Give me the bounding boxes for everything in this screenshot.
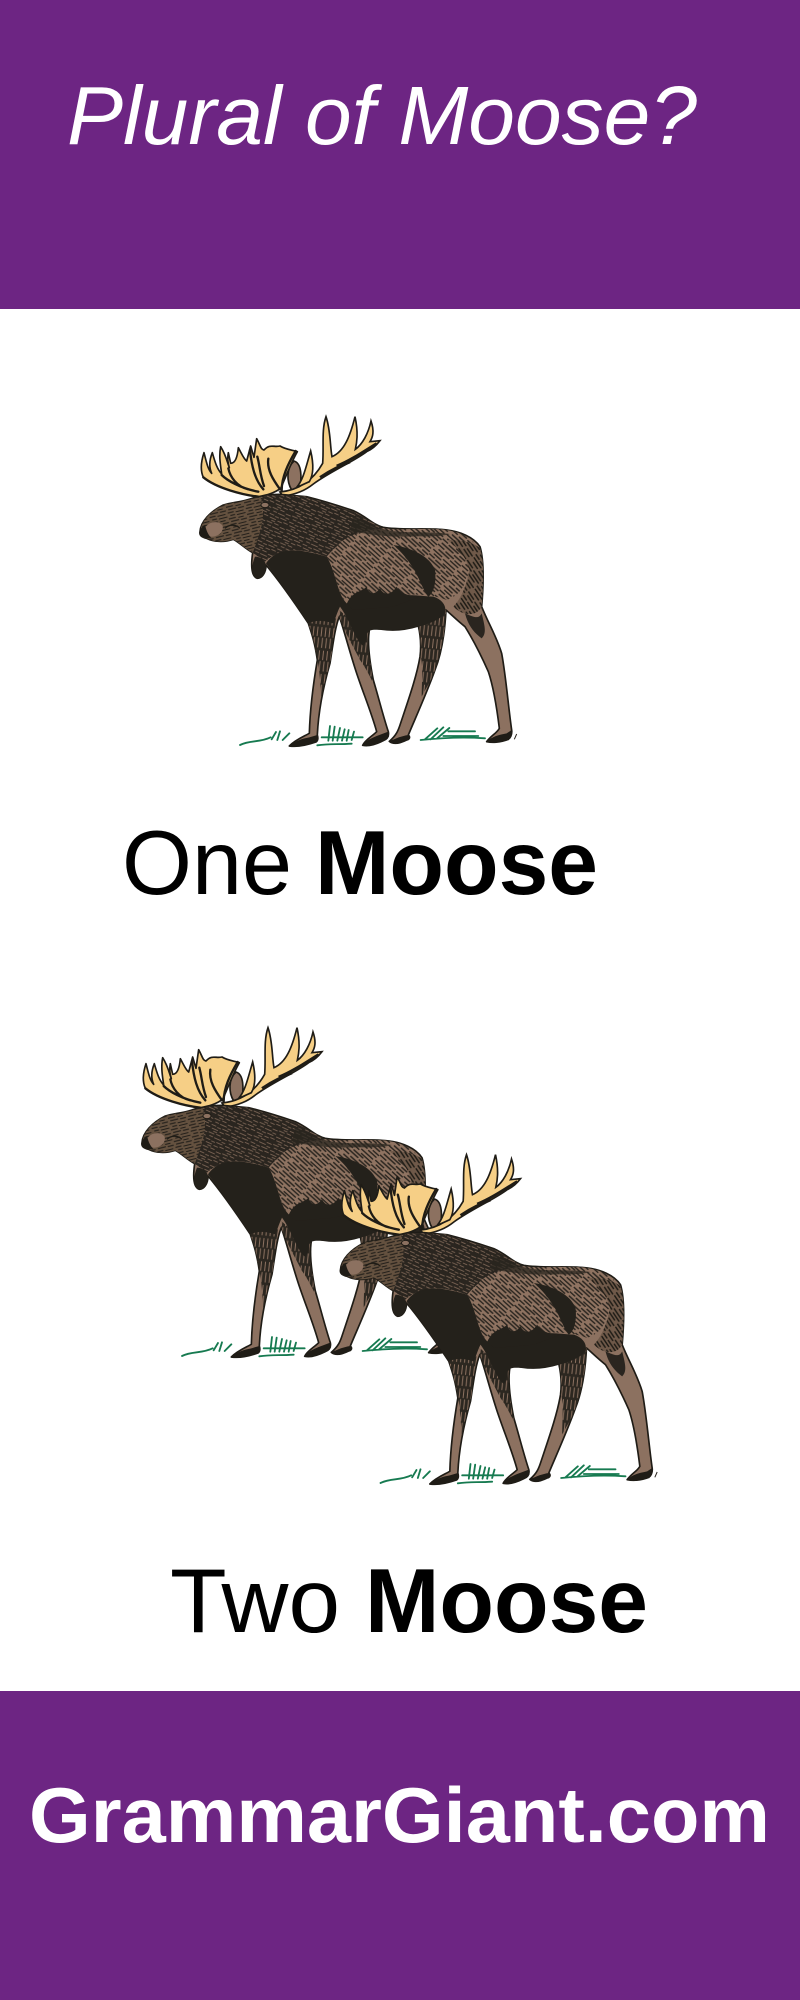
caption: Two Moose xyxy=(170,1551,648,1652)
footer band xyxy=(0,1691,800,2000)
caption: One Moose xyxy=(122,813,598,914)
footer website name: GrammarGiant.com xyxy=(29,1771,770,1859)
caption: One Moose: Moose xyxy=(315,813,598,914)
illustration: front moose of the pair xyxy=(340,1155,657,1484)
illustration: back moose of the pair xyxy=(142,1028,459,1357)
illustration: one moose xyxy=(200,417,517,746)
caption: One Moose: One xyxy=(122,813,292,914)
title: Plural of Moose? xyxy=(67,69,697,162)
caption: Two Moose: Moose xyxy=(365,1551,648,1652)
caption: Two Moose: Two xyxy=(170,1551,340,1652)
header band xyxy=(0,0,800,309)
